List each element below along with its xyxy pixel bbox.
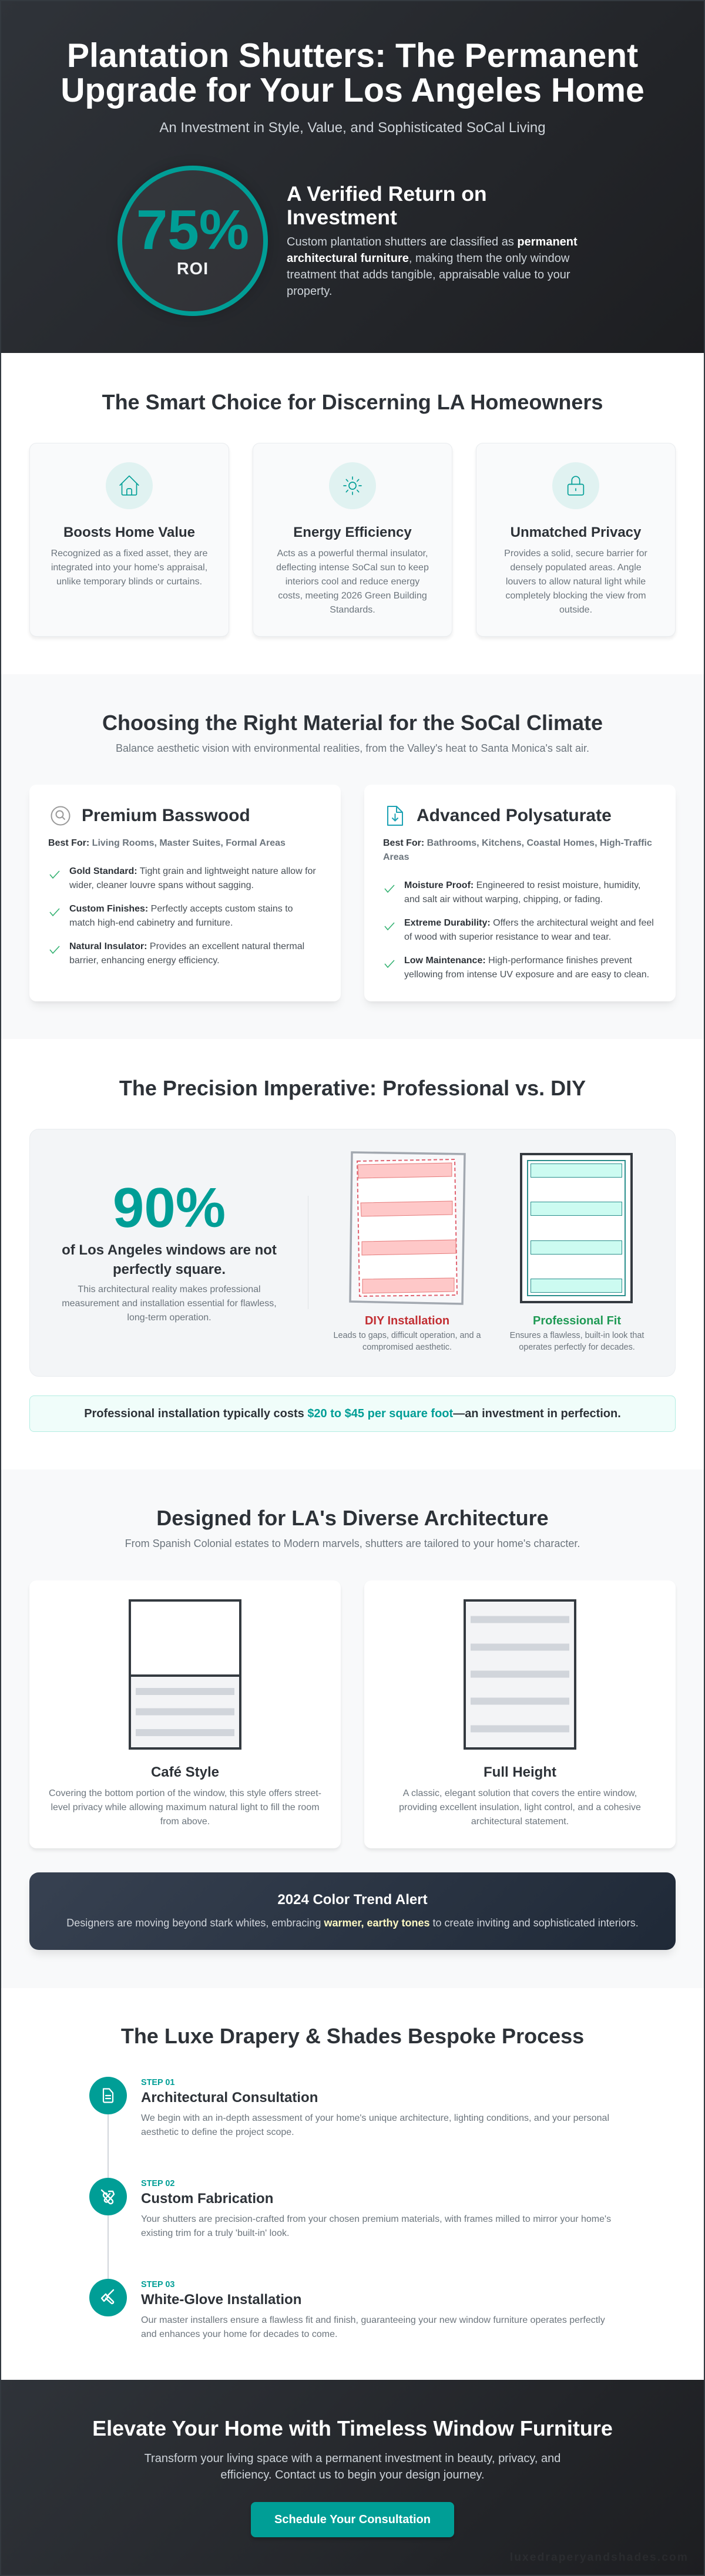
diagram: full height shutter: [464, 1599, 576, 1750]
benefit item: Gold Standard: Tight grain and lightweight nature allow for: [69, 866, 316, 876]
ROI heading: Investment: [287, 206, 397, 229]
style text: Covering the bottom portion of the window, this style offers street-: [49, 1788, 321, 1798]
icon: magnifier badge: [51, 806, 70, 826]
styles heading: Designed for LA's Diverse Architecture: [156, 1506, 549, 1530]
step text: [141, 2113, 609, 2137]
professional description: operates perfectly for decades.: [519, 1343, 635, 1352]
DIY description: compromised aesthetic.: [362, 1343, 452, 1352]
style text: [49, 1788, 321, 1827]
step number: STEP 03: [141, 2280, 174, 2289]
card title: Unmatched Privacy: [511, 524, 641, 540]
material title: Premium Basswood: [82, 806, 250, 825]
step 2: [89, 2178, 611, 2238]
professional description: Ensures a flawless, built-in look that: [510, 1331, 644, 1340]
benefit item: [384, 880, 640, 904]
step 1: [89, 2077, 609, 2137]
card text: Acts as a powerful thermal insulator,: [277, 549, 428, 559]
icon: document download: [387, 806, 403, 826]
ROI heading: A Verified Return on: [287, 182, 487, 206]
style text: architectural statement.: [471, 1817, 569, 1827]
style text: A classic, elegant solution that covers the entire window,: [403, 1788, 637, 1798]
step 3: [89, 2279, 605, 2339]
step number: STEP 02: [141, 2179, 174, 2188]
step text: We begin with an in-depth assessment of your home's unique architecture, lighting conditions, and your personal: [141, 2113, 609, 2123]
benefit item: of wood with superior resistance to wear and tear.: [404, 932, 611, 942]
stat explanation: measurement and installation essential for flawless,: [62, 1299, 277, 1309]
header section: [0, 0, 705, 353]
card text: [51, 549, 207, 587]
professional description: [510, 1331, 644, 1352]
section: precision: [0, 1039, 705, 1469]
connector line 2: [108, 2215, 109, 2279]
callout: color trend: [29, 1872, 676, 1950]
style text: level privacy while allowing maximum natural light to fill the room: [51, 1802, 320, 1812]
DIY description: Leads to gaps, difficult operation, and a: [334, 1331, 481, 1340]
step title: Architectural Consultation: [141, 2090, 318, 2106]
benefit item: [384, 918, 654, 942]
step text: existing trim for a truly 'built-in' look.: [141, 2228, 289, 2238]
trend text: Designers are moving beyond stark whites, embracing warmer, earthy tones to create inviting and sophisticated interiors.: [66, 1917, 639, 1929]
callout: installation cost: [29, 1395, 676, 1432]
label: DIY installation: DIY Installation: [365, 1314, 449, 1327]
card text: unlike temporary blinds or curtains.: [56, 577, 202, 587]
benefit item: Custom Finishes: Perfectly accepts custom stains to: [69, 904, 293, 914]
panel: stat and comparison: [29, 1129, 676, 1377]
step text: and enhances your home for decades to come.: [141, 2329, 337, 2339]
title: [61, 37, 644, 109]
card text: costs, meeting 2026 Green Building: [278, 591, 427, 601]
best-for line: Best For: Living Rooms, Master Suites, Formal Areas: [48, 838, 286, 848]
diagram: DIY window: [349, 1151, 466, 1305]
CTA text: [145, 2452, 560, 2481]
process heading: The Luxe Drapery & Shades Bespoke Process: [121, 2024, 584, 2048]
stat caption: perfectly square.: [113, 1262, 226, 1277]
card text: interiors cool and reduce energy: [286, 577, 419, 587]
materials subtitle: Balance aesthetic vision with environmental realities, from the Valley's heat to Santa Monica's salt air.: [116, 742, 589, 754]
title: Plantation Shutters: The Permanent: [67, 37, 638, 75]
card: unmatched privacy: [476, 443, 676, 637]
card: premium basswood: [29, 785, 341, 1001]
benefit item: and salt air without warping, chipping, or fading.: [404, 894, 603, 904]
style text: [399, 1788, 641, 1827]
card: advanced polysaturate: [364, 785, 676, 1001]
stat explanation: [62, 1284, 277, 1323]
benefit item: Low Maintenance: High-performance finishes prevent: [404, 956, 632, 966]
benefits heading: The Smart Choice for Discerning LA Homeowners: [102, 390, 603, 414]
ROI paragraph: Custom plantation shutters are classified as permanent: [287, 236, 578, 248]
stat caption: of Los Angeles windows are not: [62, 1242, 277, 1258]
best-for line: [383, 838, 652, 862]
styles subtitle: From Spanish Colonial estates to Modern marvels, shutters are tailored to your home's character.: [125, 1538, 580, 1549]
card text: deflecting intense SoCal sun to keep: [276, 563, 429, 573]
callout: installation cost: Professional installation typically costs $20 to $45 per square foot—an investment in perfection.: [84, 1407, 621, 1420]
icon: sun: [329, 462, 376, 509]
card text: [276, 549, 429, 615]
ROI circle stat: [118, 166, 268, 316]
best-for line: Areas: [383, 852, 409, 862]
benefit item: match high-end cabinetry and furniture.: [69, 918, 233, 928]
benefit item: Extreme Durability: Offers the architectural weight and feel: [404, 918, 654, 928]
watermark: luxedraperyandshades.com: [510, 2551, 689, 2564]
CTA text: efficiency. Contact us to begin your design journey.: [220, 2469, 485, 2481]
card text: Recognized as a fixed asset, they are: [51, 549, 207, 559]
card: energy efficiency: [253, 443, 452, 637]
precision heading: The Precision Imperative: Professional vs. DIY: [119, 1076, 586, 1100]
section: materials: [0, 674, 705, 1039]
material title: Advanced Polysaturate: [417, 806, 612, 825]
subtitle: An Investment in Style, Value, and Sophisticated SoCal Living: [159, 120, 546, 136]
icon: fabrication tools: [89, 2178, 127, 2215]
icon: hammer: [89, 2279, 127, 2316]
ROI heading: [287, 182, 487, 229]
icon: document: [89, 2077, 127, 2114]
benefit item: wider, cleaner louvre spans without sagging.: [69, 880, 254, 890]
label: professional fit: Professional Fit: [533, 1314, 621, 1327]
CTA heading: Elevate Your Home with Timeless Window Furniture: [92, 2416, 613, 2440]
stat label: ROI: ROI: [177, 260, 209, 278]
icon: lock: [552, 462, 599, 509]
diagram: cafe shutter: [129, 1599, 241, 1750]
best-for line: Best For: Bathrooms, Kitchens, Coastal Homes, High-Traffic: [383, 838, 652, 848]
benefit item: [49, 866, 316, 890]
step text: [141, 2214, 611, 2238]
step text: Your shutters are precision-crafted from your chosen premium materials, with frames milled to mirror your home's: [141, 2214, 611, 2224]
trend title: 2024 Color Trend Alert: [277, 1892, 428, 1908]
style title: Café Style: [151, 1764, 219, 1780]
section: architecture styles: [0, 1469, 705, 1988]
card text: densely populated areas. Angle: [510, 563, 642, 573]
step text: aesthetic to define the project scope.: [141, 2127, 294, 2137]
step title: White-Glove Installation: [141, 2292, 301, 2308]
benefit item: barrier, enhancing energy efficiency.: [69, 956, 220, 966]
ROI paragraph: property.: [287, 285, 332, 298]
section: process: [0, 1988, 705, 2380]
style title: Full Height: [484, 1764, 556, 1780]
card text: louvers to allow natural light while: [506, 577, 646, 587]
title: Upgrade for Your Los Angeles Home: [61, 72, 644, 109]
step number: STEP 01: [141, 2078, 174, 2087]
step text: [141, 2315, 605, 2339]
card text: Provides a solid, secure barrier for: [504, 549, 647, 559]
style text: from above.: [160, 1817, 210, 1827]
section: call to action: [0, 2380, 705, 2576]
card text: outside.: [559, 605, 592, 615]
card: cafe style: [29, 1580, 341, 1848]
DIY description: [334, 1331, 481, 1352]
benefit item: [384, 956, 649, 980]
icon: house: [106, 462, 153, 509]
style text: providing excellent insulation, light control, and a cohesive: [399, 1802, 641, 1812]
ROI paragraph: [287, 236, 578, 298]
ROI paragraph: treatment that adds tangible, appraisable value to your: [287, 268, 570, 281]
materials heading: Choosing the Right Material for the SoCal Climate: [102, 711, 603, 735]
CTA button: [251, 2502, 454, 2537]
stat: 75%: 75%: [136, 199, 249, 261]
benefit item: [49, 941, 304, 966]
connector line 1: [108, 2114, 109, 2178]
stat explanation: This architectural reality makes professional: [78, 1284, 261, 1294]
stat caption: [62, 1242, 277, 1277]
ROI paragraph: architectural furniture, making them the only window: [287, 252, 569, 265]
benefit item: Moisture Proof: Engineered to resist moisture, humidity,: [404, 880, 640, 890]
step title: Custom Fabrication: [141, 2191, 273, 2207]
CTA text: Transform your living space with a permanent investment in beauty, privacy, and: [145, 2452, 560, 2465]
card: boosts home value: [29, 443, 229, 637]
card text: integrated into your home's appraisal,: [51, 563, 207, 573]
card text: [504, 549, 647, 615]
stat explanation: long-term operation.: [127, 1313, 212, 1323]
card text: completely blocking the view from: [505, 591, 646, 601]
card: full height: [364, 1580, 676, 1848]
step text: Our master installers ensure a flawless fit and finish, guaranteeing your new window furniture operates perfectly: [141, 2315, 605, 2325]
card text: Standards.: [330, 605, 375, 615]
diagram: professional window: [520, 1153, 633, 1303]
section: benefits: [0, 353, 705, 674]
benefit item: [49, 904, 293, 928]
CTA button: Schedule Your Consultation: [274, 2513, 431, 2526]
benefit item: yellowing from intense UV exposure and are easy to clean.: [404, 970, 649, 980]
benefit item: Natural Insulator: Provides an excellent natural thermal: [69, 941, 304, 951]
card title: Energy Efficiency: [293, 524, 412, 540]
card title: Boosts Home Value: [63, 524, 195, 540]
stat: 90%: 90%: [113, 1176, 226, 1239]
